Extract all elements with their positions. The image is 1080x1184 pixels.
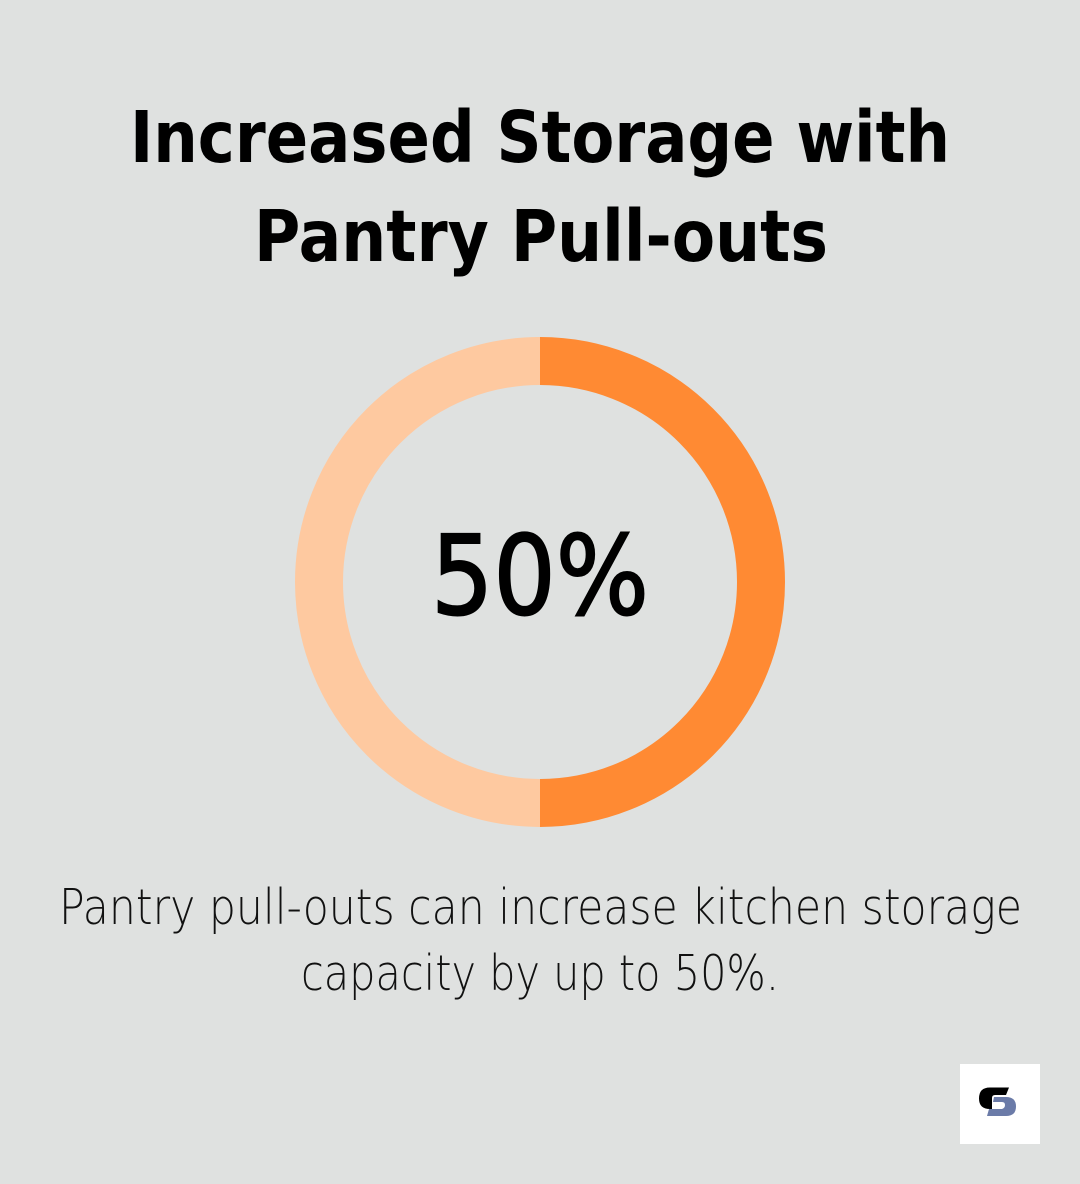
center value: 50% <box>431 512 649 640</box>
title: Pantry Pull-outs <box>254 195 828 278</box>
description text <box>59 879 1022 1002</box>
donut chart: 50% <box>319 361 761 803</box>
description text: capacity by up to 50%. <box>301 945 779 1002</box>
title: Increased Storage with <box>130 96 950 179</box>
icon: logo mark <box>979 1088 1016 1116</box>
title <box>130 96 950 278</box>
logo badge <box>960 1064 1040 1144</box>
highlighted ring segment <box>540 361 761 803</box>
remaining ring segment <box>319 361 540 803</box>
